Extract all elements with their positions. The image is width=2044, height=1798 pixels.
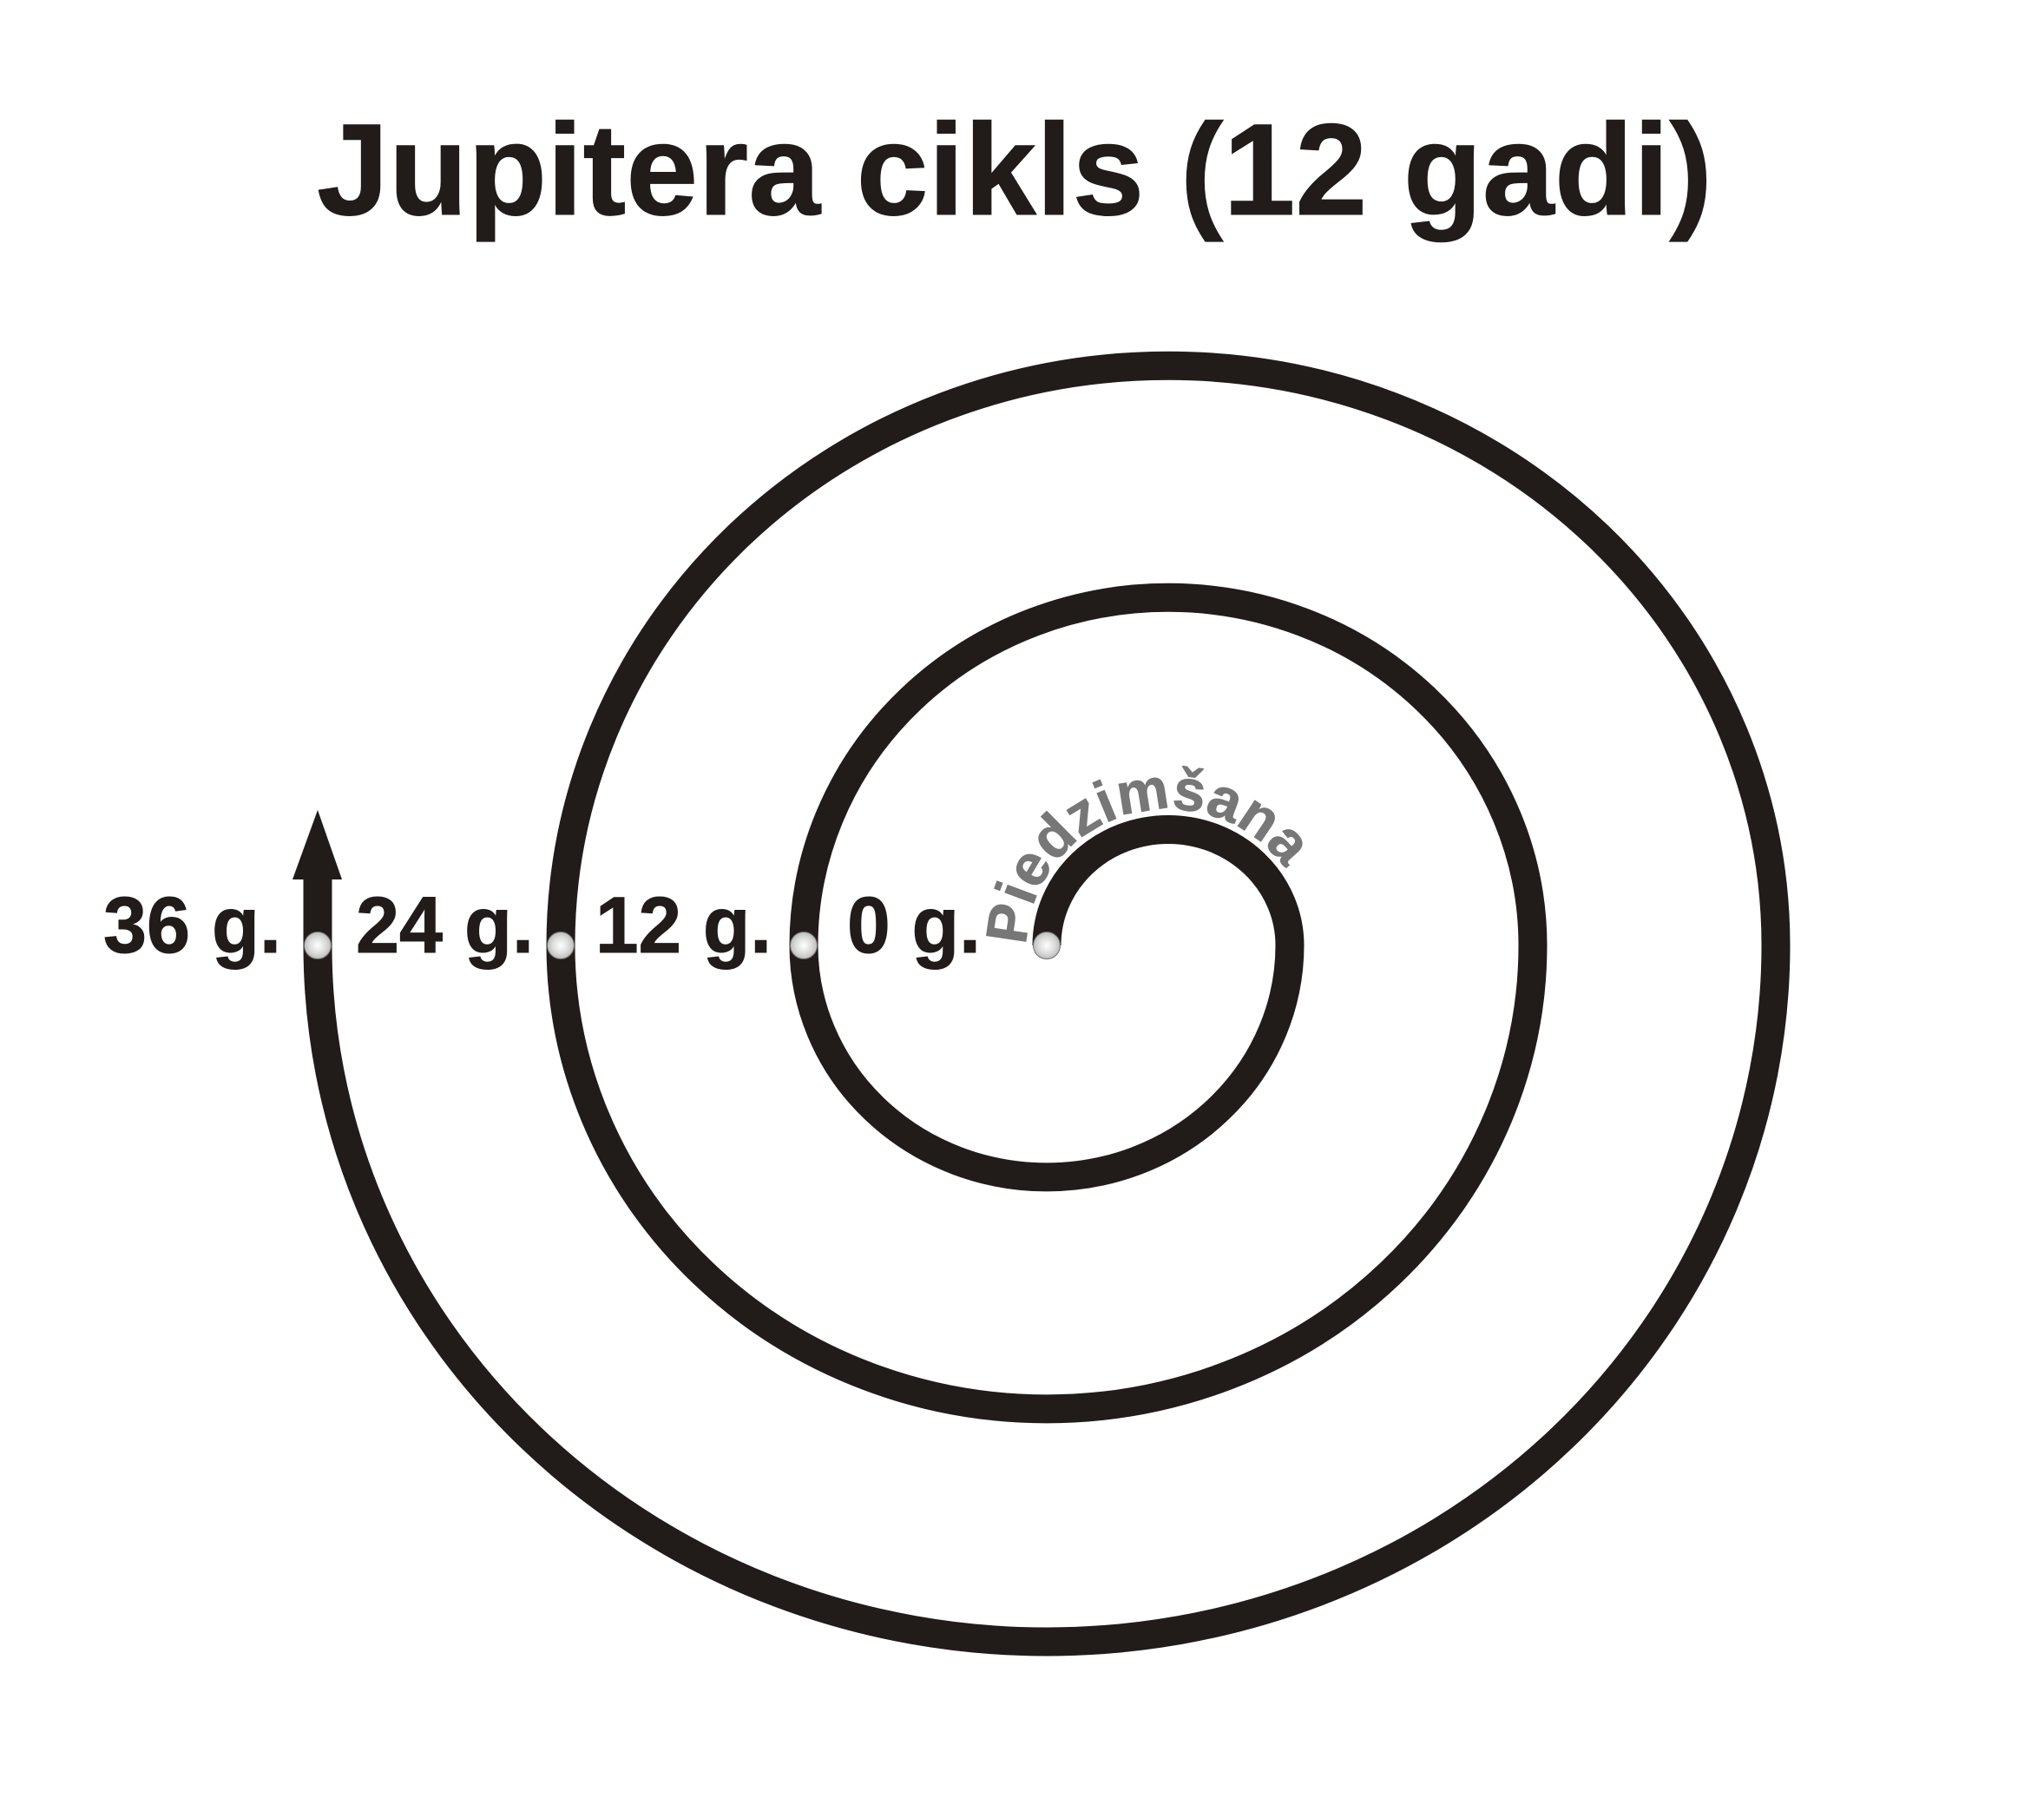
spiral timeline with arrow (292, 366, 1776, 1642)
title: Jupitera cikls (12 gadi) (317, 96, 1712, 242)
arrow head (292, 810, 342, 879)
marker: 36 years (304, 932, 332, 958)
label: 36 years: 36 g. (103, 881, 281, 970)
marker: 24 years (547, 932, 575, 958)
label: 0 years: 0 g. (847, 881, 981, 970)
label: 24 years: 24 g. (356, 881, 534, 970)
curved label: birth: Piedzimšana (986, 766, 1303, 942)
marker: 12 years (790, 932, 818, 958)
cycle markers (304, 932, 1061, 958)
label: 12 years: 12 g. (595, 881, 772, 970)
spiral line (318, 366, 1776, 1642)
year labels (103, 881, 981, 970)
marker: birth (1033, 932, 1061, 958)
